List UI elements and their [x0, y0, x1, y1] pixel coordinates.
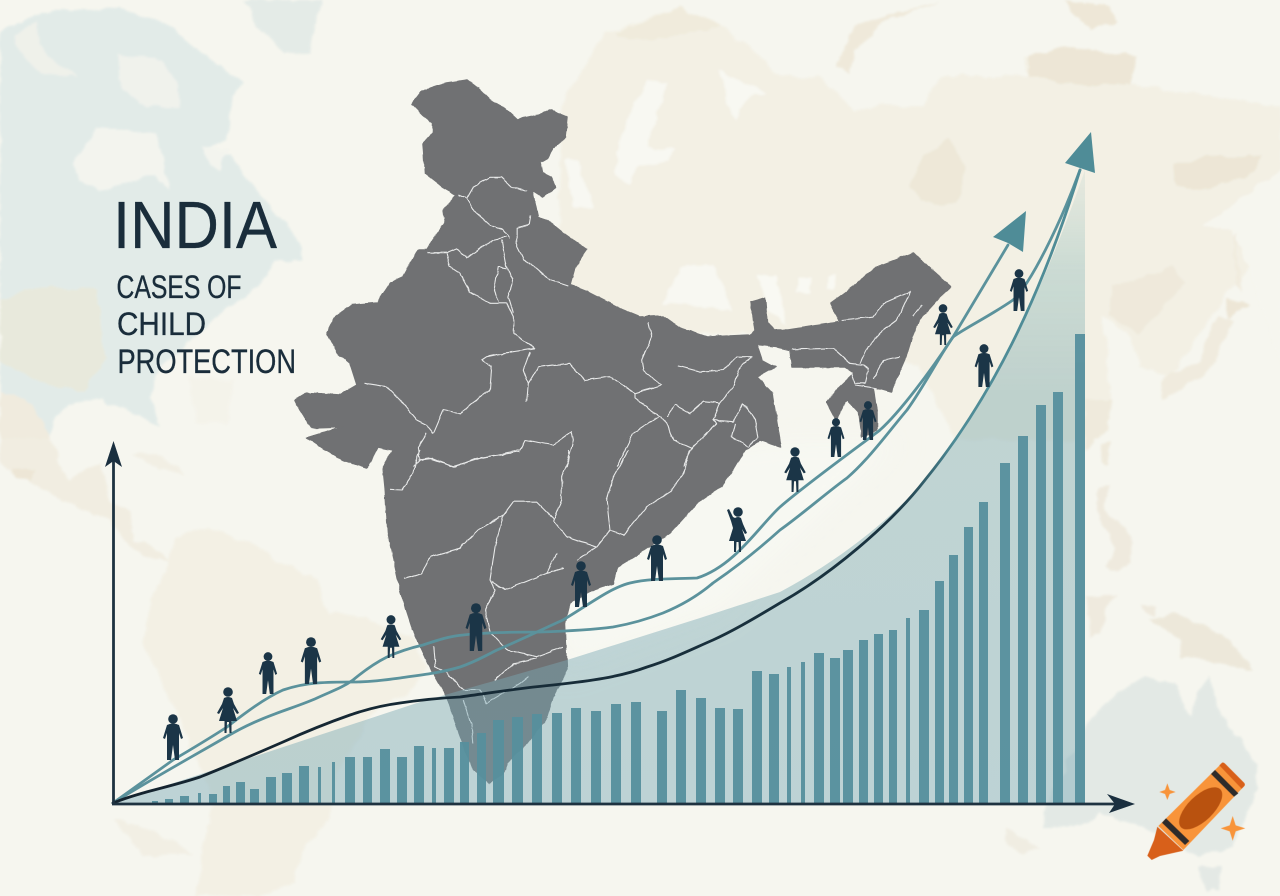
shaded area under growth curve: [113, 170, 1085, 803]
growth line: upper teal, ends at large arrow: [113, 170, 1080, 803]
state borders: south: [390, 450, 690, 743]
chart axes: [105, 441, 1135, 813]
subtitle: PROTECTION: [118, 343, 296, 381]
subtitle: [116, 269, 296, 381]
growth line: lower teal, ends at small arrow: [113, 245, 1008, 803]
arrowhead: middle teal line: [993, 211, 1026, 252]
icon: crayon with sparkles: [1147, 762, 1245, 860]
arrowhead: main curve: [1065, 132, 1095, 173]
subtitle: CASES OF: [116, 269, 242, 305]
southeast asia, new guinea and australia land: [1007, 400, 1257, 890]
bar chart: [152, 334, 1085, 803]
title: INDIA: [113, 188, 277, 263]
subtitle: CHILD: [117, 306, 206, 342]
growth line: dark main curve: [113, 170, 1080, 803]
north america land: [0, 0, 320, 440]
map: India: [295, 80, 951, 783]
children figures along the curves: [163, 269, 1028, 760]
state borders: north and centre: [365, 177, 758, 467]
central america and south america land: [0, 440, 427, 896]
eurasia land: [560, 0, 1280, 440]
state borders: north-east: [792, 292, 922, 388]
